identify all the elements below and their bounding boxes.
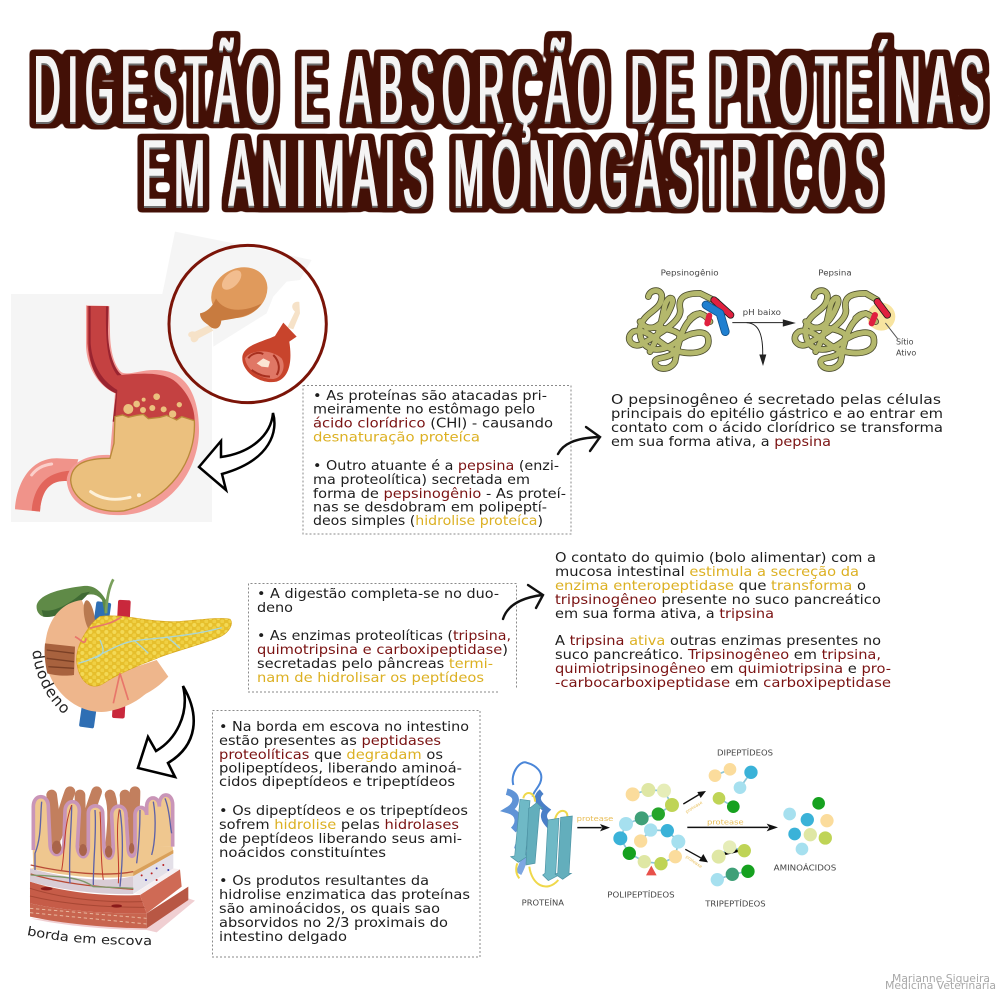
text block: brush border: polipeptídeos, liberando aminoá- bbox=[219, 760, 462, 776]
diagram: pepsinogen to pepsin bbox=[629, 267, 916, 369]
text block: stomach digestion: ma proteolítica) secretada em bbox=[313, 472, 530, 488]
label: borda em escova bbox=[27, 935, 153, 945]
title: EM ANIMAIS MÓNOGÁSTRICOS bbox=[142, 120, 879, 227]
text block: brush border: sofrem hidrolise pelas hidrolases bbox=[219, 817, 459, 833]
amino acids bbox=[783, 797, 834, 855]
text block: duodenum digestion: deno bbox=[257, 600, 293, 616]
text block: pepsinogen: O pepsinogêneo é secretado pelas células bbox=[611, 392, 941, 408]
text block: pepsinogen: em sua forma ativa, a pepsina bbox=[611, 434, 831, 450]
diagram labels: TRIPEPTÍDEOS bbox=[704, 898, 766, 909]
label: pepsinogênio: Pepsinogênio bbox=[661, 267, 719, 277]
label: sítio ativo: Sítio bbox=[896, 337, 914, 346]
title: DIGESTÃO E ABSORÇÃO DE PROTEÍNAS bbox=[34, 36, 984, 143]
label: sítio ativo: Ativo bbox=[896, 349, 916, 358]
text block: brush border: estão presentes as peptidases bbox=[219, 733, 441, 749]
diagram labels: AMINOÁCIDOS bbox=[774, 861, 836, 872]
text block: stomach digestion: • As proteínas são atacadas pri- bbox=[313, 388, 547, 404]
icon: intestinal villi bbox=[28, 786, 195, 946]
text block: brush border: de peptídeos liberando seus ami- bbox=[219, 831, 462, 847]
text block: stomach digestion: meiramente no estômago pelo bbox=[313, 402, 535, 418]
text block: enteropeptidase: O contato do quimio (bolo alimentar) com a bbox=[555, 550, 876, 566]
text block: brush border: proteolíticas que degradam os bbox=[219, 747, 443, 763]
text block: enteropeptidase: suco pancreático. Tripsinogêneo em tripsina, bbox=[555, 647, 881, 663]
arrow: to amino acids bbox=[687, 824, 778, 831]
arrow: box to enzyme text bbox=[503, 585, 543, 619]
diagram labels: DIPEPTÍDEOS bbox=[717, 746, 773, 757]
credit: Marianne Siqueira bbox=[892, 972, 990, 985]
label: duodeno bbox=[32, 651, 76, 724]
text block: brush border: • Na borda em escova no intestino bbox=[219, 719, 469, 735]
text block: stomach digestion: • Outro atuante é a pepsina (enzi- bbox=[313, 458, 559, 474]
text block: brush border: hidrolise enzimatica das proteínas bbox=[219, 887, 470, 903]
diagram: protein hydrolysis bbox=[507, 746, 836, 909]
text block: duodenum digestion: • A digestão completa-se no duo- bbox=[257, 586, 499, 602]
arrow: pH reaction bbox=[732, 320, 794, 364]
text block: brush border: • Os produtos resultantes da bbox=[219, 873, 429, 889]
text block: enteropeptidase: em sua forma ativa, a tripsina bbox=[555, 606, 774, 622]
text block: duodenum digestion bbox=[248, 584, 516, 692]
polypeptide chain bbox=[613, 783, 685, 875]
text block: pepsinogen bbox=[611, 392, 943, 450]
arrow: pancreas to intestine bbox=[138, 686, 194, 777]
text block: pepsinogen: contato com o ácido clorídrico se transforma bbox=[611, 420, 943, 436]
protease labels: protease bbox=[684, 854, 703, 870]
text block: duodenum digestion: secretadas pelo pâncreas termi- bbox=[257, 656, 493, 672]
icon: protein ribbon bbox=[507, 762, 572, 887]
icon: stomach illustration bbox=[11, 232, 326, 522]
arrow: to tripeptides bbox=[685, 849, 708, 862]
dipeptides bbox=[709, 763, 758, 813]
label: sítio ativo bbox=[896, 337, 916, 358]
text block: enteropeptidase bbox=[555, 550, 891, 691]
text block: brush border: cidos dipeptídeos e tripeptídeos bbox=[219, 774, 455, 790]
icon: intestinal villi: borda em escova bbox=[28, 926, 151, 946]
icon: pancreas and duodenum: duodeno bbox=[32, 650, 68, 713]
text block: stomach digestion: nas se desdobram em polipeptí- bbox=[313, 500, 547, 516]
arrow: to dipeptides bbox=[683, 791, 706, 804]
protease labels: protease bbox=[685, 800, 704, 815]
text block: duodenum digestion: • As enzimas proteolíticas ( tripsina, bbox=[257, 628, 511, 644]
arrow: meat to stomach bbox=[199, 413, 274, 490]
credit bbox=[885, 972, 996, 992]
text block: stomach digestion: deos simples ( hidrolise proteíca ) bbox=[313, 513, 543, 529]
credit: Medicina Veterinaria bbox=[885, 979, 996, 992]
text block: stomach digestion: desnaturação proteíca bbox=[313, 430, 480, 446]
tripeptides bbox=[711, 840, 755, 886]
text block: enteropeptidase: A tripsina ativa outras enzimas presentes no bbox=[555, 633, 881, 649]
diagram labels bbox=[522, 746, 836, 909]
text block: duodenum digestion: nam de hidrolisar os peptídeos bbox=[257, 670, 484, 686]
text block: enteropeptidase: tripsinogêneo presente no suco pancreático bbox=[555, 592, 881, 608]
label: pH baixo: pH baixo bbox=[743, 308, 781, 317]
text block: stomach digestion bbox=[303, 386, 571, 534]
arrow: protease 1 bbox=[577, 824, 610, 831]
text block: stomach digestion: ácido clorídrico (CHl) - causando bbox=[313, 416, 553, 432]
diagram labels: POLIPEPTÍDEOS bbox=[607, 889, 675, 900]
protease labels: protease bbox=[707, 819, 744, 827]
text block: brush border: absorvidos no 2/3 proximais do bbox=[219, 915, 448, 931]
text block: brush border bbox=[212, 710, 480, 957]
text block: enteropeptidase: quimiotripsinogêneo em quimiotripsina e pro- bbox=[555, 661, 891, 677]
text block: stomach digestion: forma de pepsinogênio - As proteí- bbox=[313, 486, 566, 502]
text block: enteropeptidase: enzima enteropeptidase que transforma o bbox=[555, 578, 866, 594]
molecule: pepsin bbox=[795, 291, 897, 369]
icon: pancreas and duodenum bbox=[32, 578, 232, 728]
icon: meat circle bbox=[169, 245, 326, 403]
text block: pepsinogen: principais do epitélio gástrico e ao entrar em bbox=[611, 406, 943, 422]
text block: duodenum digestion: quimotripsina e carboxipeptidase ) bbox=[257, 642, 508, 658]
protease labels: protease bbox=[577, 815, 613, 823]
text block: brush border: são aminoácidos, os quais sao bbox=[219, 901, 440, 917]
label: pepsina: Pepsina bbox=[818, 268, 852, 277]
title bbox=[34, 36, 984, 227]
protease labels bbox=[577, 800, 744, 870]
arrow: box to pepsin text bbox=[558, 427, 600, 454]
text block: brush border: noácidos constituíntes bbox=[219, 845, 386, 861]
text block: brush border: intestino delgado bbox=[219, 929, 347, 945]
text block: enteropeptidase: -carbocarboxipeptidase em carboxipeptidase bbox=[555, 675, 891, 691]
diagram labels: PROTEÍNA bbox=[522, 896, 565, 907]
text block: enteropeptidase: mucosa intestinal estimula a secreção da bbox=[555, 564, 859, 580]
text block: brush border: • Os dipeptídeos e os tripeptídeos bbox=[219, 803, 468, 819]
molecule: pepsinogen bbox=[629, 291, 731, 369]
